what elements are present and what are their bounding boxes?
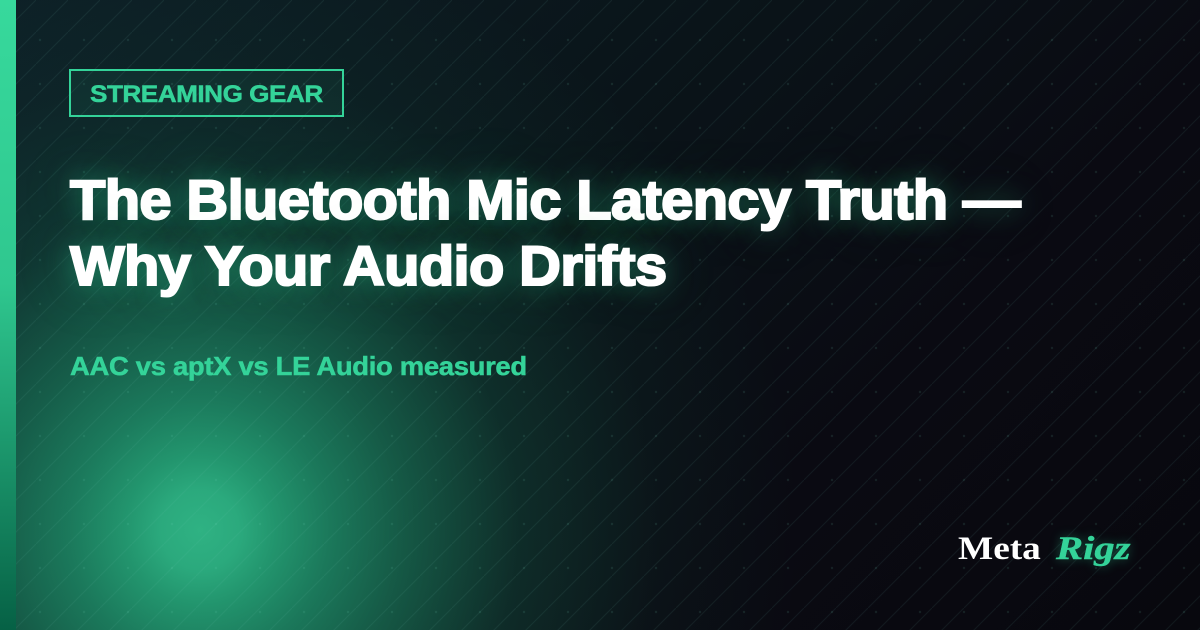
brand logo — [958, 531, 1133, 570]
title — [60, 166, 1022, 302]
title: Why Your Audio Drifts — [70, 234, 667, 297]
subtitle: AAC vs aptX vs LE Audio measured — [70, 351, 527, 381]
brand logo: Rigz — [1056, 531, 1130, 567]
badge label: STREAMING GEAR — [90, 81, 323, 108]
left accent bar — [0, 0, 16, 630]
category badge — [69, 69, 344, 117]
brand logo: Meta — [958, 531, 1041, 567]
title: The Bluetooth Mic Latency Truth — — [70, 168, 1020, 231]
